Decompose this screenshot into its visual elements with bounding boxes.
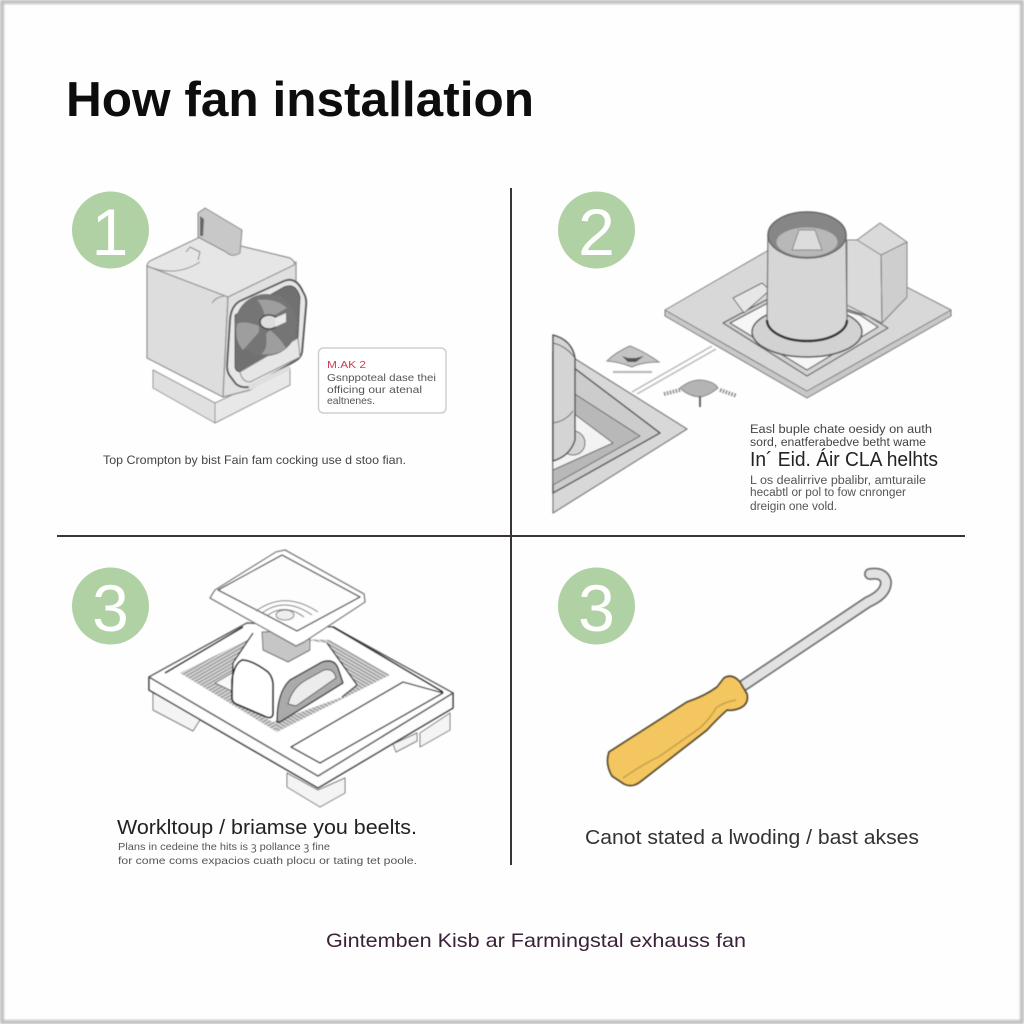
caption: step 1: Top Crompton by bist Fain fam cocking use d stoo fian. [103, 453, 406, 467]
icon: small fan parts and connector lines [607, 346, 737, 407]
panel: step 2 [553, 192, 951, 513]
step badge 2 [558, 192, 635, 269]
footer caption: Gintemben Kisb ar Farmingstal exhauss fan [326, 930, 746, 952]
callout: MAK 2 [318, 348, 446, 413]
text block: step 2: hecabtl or pol to fow cnronger [750, 487, 906, 499]
step badge 1 [72, 192, 149, 269]
step badge 3 (second): 3 [578, 571, 615, 645]
callout: MAK 2: ealtnenes. [327, 395, 375, 407]
text block: step 2: Easl buple chate oesidy on auth [750, 424, 932, 436]
text block: step 2: L os dealirrive pbalibr, amturaile [750, 475, 926, 487]
step badge 1: 1 [92, 195, 128, 269]
icon: corner of second plate [553, 335, 687, 513]
text block: step 3: for come coms expacios cuath plocu or tating tet poole. [118, 855, 417, 867]
icon: duct on mounting plate [665, 212, 951, 398]
step badge 3 (second) [558, 568, 635, 645]
caption: step 4: Canot stated a lwoding / bast akses [585, 827, 919, 849]
panel: step 3 [72, 550, 453, 867]
icon: exhaust fan unit [147, 208, 306, 423]
text block: step 2: In´ Eid. Áir CLA helhts [750, 448, 938, 471]
text block: step 3: Plans in cedeine the hits is ꝫ pollance ꝫ fine [118, 841, 330, 853]
step badge 3 [72, 568, 149, 645]
step badge 3: 3 [92, 571, 129, 645]
callout: MAK 2: Gsnppoteal dase thei [327, 372, 436, 384]
text block: step 3: Workltoup / briamse you beelts. [117, 817, 417, 839]
icon: fan assembly on frame [149, 550, 453, 807]
panel: step 1 [72, 192, 446, 467]
text block: step 2: dreigin one vold. [750, 501, 837, 513]
text block: step 2: sord, enatferabedve betht wame [750, 437, 926, 449]
callout: MAK 2: officing our atenal [327, 384, 422, 396]
callout: MAK 2: M.AK 2 [327, 359, 366, 371]
step badge 2: 2 [578, 195, 615, 269]
text block: step 2 [750, 424, 938, 513]
text block: step 3 [117, 817, 417, 867]
title: How fan installation [66, 73, 534, 127]
panel: step 4 [558, 568, 919, 849]
icon: hook-tipped screwdriver [608, 574, 886, 786]
